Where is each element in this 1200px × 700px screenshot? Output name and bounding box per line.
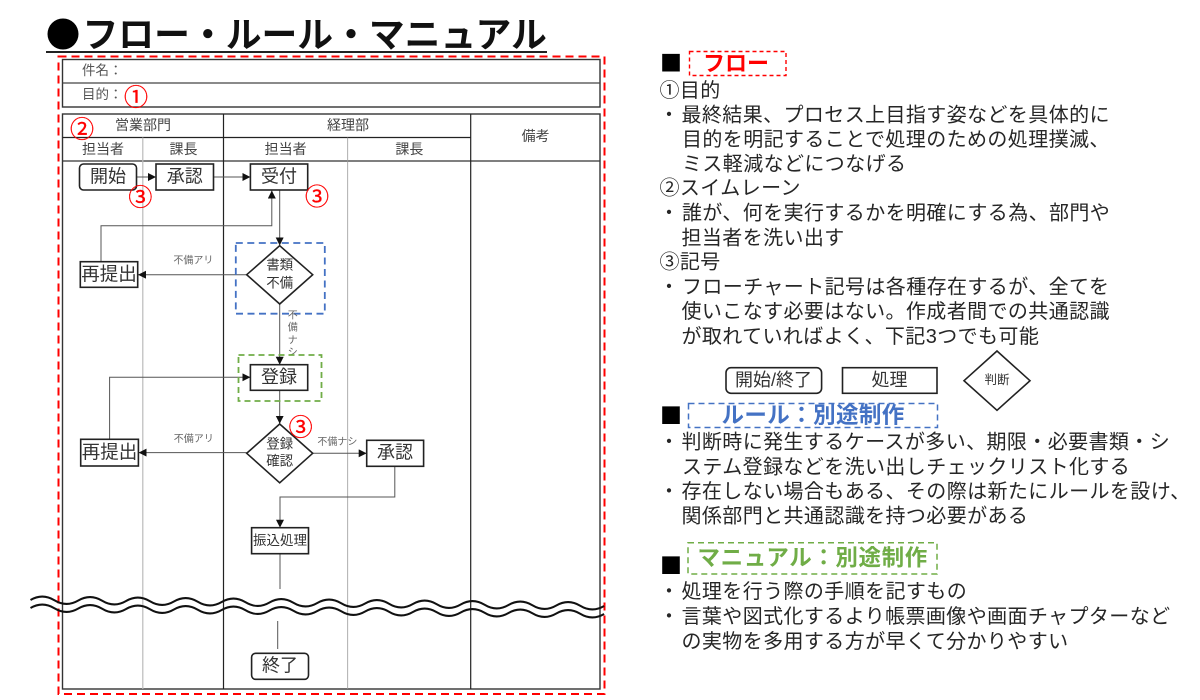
decision: registration check: 登録	[266, 436, 294, 452]
green dashed manual highlight	[238, 355, 322, 401]
text block: manual: 言葉や図式化するより帳票画像や画面チャプターなど	[682, 605, 1170, 628]
text block: rule: ステム登録などを洗い出しチェックリスト化する	[682, 456, 1130, 479]
swimlane table: 経理部	[327, 117, 369, 133]
heading: manual: マニュアル：別途制作	[698, 546, 928, 570]
label: defect yes 2: 不備アリ	[174, 433, 214, 445]
text block: rule	[659, 431, 1190, 528]
text block: manual: ・	[659, 606, 679, 628]
step: start	[80, 164, 136, 190]
step: start: 開始	[90, 166, 126, 186]
decision: document check: 不備	[266, 276, 293, 290]
decision: registration check: 確認	[266, 454, 294, 468]
swimlane table: 担当者	[82, 141, 124, 157]
text block: symbols: ・	[659, 277, 679, 299]
text block: purpose: ①目的	[660, 74, 721, 103]
step: receipt	[250, 164, 308, 190]
text block: rule: 存在しない場合もある、その際は新たにルールを設け、	[682, 480, 1190, 503]
text block: purpose	[659, 74, 1110, 175]
text block: rule: ・	[659, 432, 679, 454]
heading: manual: ■	[660, 548, 682, 580]
text block: purpose: 目的を明記することで処理のための処理撲滅、	[682, 128, 1110, 151]
text block: manual: 処理を行う際の手順を記すもの	[682, 580, 967, 603]
symbol: process	[842, 368, 937, 393]
red dashed frame	[58, 56, 604, 694]
symbol: start/end: 開始/終了	[735, 370, 812, 390]
heading: flow: ■	[660, 46, 682, 78]
subject and purpose table: 目的：	[82, 87, 122, 102]
heading: manual	[660, 543, 937, 580]
step: receipt: 受付	[261, 166, 297, 186]
heading: rule: ルール：別途制作	[722, 403, 905, 428]
text block: manual	[659, 580, 1170, 653]
text block: manual: ・	[659, 581, 679, 603]
symbol: start/end	[726, 368, 822, 393]
step: approval	[156, 164, 214, 190]
blue dashed rule highlight	[236, 243, 325, 314]
step: end	[252, 653, 308, 679]
swimlane table: 課長	[170, 141, 198, 157]
step: resubmit 1: 再提出	[81, 264, 137, 284]
label: defect yes 1: 不備アリ	[173, 254, 213, 266]
step: approval 2: 承認	[377, 442, 413, 462]
step: registration: 登録	[261, 367, 297, 387]
label: defect none vertical: 不	[288, 310, 298, 322]
callout number 3 start: ③	[128, 178, 152, 212]
heading: rule	[660, 398, 938, 430]
step: approval: 承認	[167, 166, 203, 186]
decision: registration check	[247, 424, 313, 483]
subject and purpose table: 件名：	[82, 63, 122, 78]
text block: symbols: フローチャート記号は各種存在するが、全てを	[682, 276, 1109, 299]
callout number 3 receipt: ③	[305, 177, 329, 212]
step: resubmit 2: 再提出	[82, 442, 137, 462]
callout number 2: ②	[70, 110, 94, 144]
symbol: process: 処理	[872, 370, 908, 390]
text block: rule: ・	[659, 481, 679, 503]
decision: document check: 書類	[266, 258, 294, 272]
heading: flow	[660, 46, 786, 78]
heading: rule: ■	[660, 398, 682, 430]
title: フロー・ルール・マニュアル	[82, 15, 547, 55]
callout number 1: ①	[124, 78, 148, 112]
text block: purpose: ・	[659, 104, 679, 126]
panel: flow explanation	[659, 46, 1190, 653]
step: approval 2	[367, 440, 424, 466]
break wave lines	[30, 597, 604, 617]
text block: rule: 関係部門と共通認識を持つ必要がある	[682, 505, 1028, 528]
swimlane table: 備考	[522, 128, 550, 144]
panel: flowchart form	[30, 56, 604, 694]
swimlane table: 担当者	[265, 141, 307, 157]
text block: swimlane: 誰が、何を実行するかを明確にする為、部門や	[682, 202, 1110, 225]
text block: swimlane: 担当者を洗い出す	[682, 226, 845, 249]
step: transfer processing	[252, 528, 308, 554]
swimlane table: 営業部門	[115, 117, 171, 133]
legend symbols	[726, 351, 1030, 410]
step: transfer processing: 振込処理	[253, 533, 307, 548]
text block: purpose: 最終結果、プロセス上目指す姿などを具体的に	[682, 103, 1110, 126]
label: defect none vertical: シ	[288, 348, 298, 358]
callout number 3 check: ③	[289, 408, 313, 442]
text block: swimlane: ・	[659, 203, 679, 225]
step: registration	[250, 365, 308, 390]
text block: rule: 判断時に発生するケースが多い、期限・必要書類・シ	[682, 431, 1170, 454]
text block: swimlane: ②スイムレーン	[660, 172, 801, 201]
symbol: decision	[964, 351, 1030, 410]
text block: symbols	[659, 246, 1110, 348]
step: end: 終了	[262, 656, 298, 676]
label: defect none: 不備ナシ	[317, 436, 357, 448]
text block: manual: の実物を多用する方が早くて分かりやすい	[682, 630, 1068, 653]
heading: flow: フロー	[703, 51, 769, 76]
text block: symbols: 使いこなす必要はない。作成者間での共通認識	[682, 300, 1110, 323]
text block: symbols: が取れていればよく、下記3つでも可能	[682, 325, 1039, 348]
text block: purpose: ミス軽減などにつなげる	[682, 152, 906, 175]
text block: swimlane	[659, 172, 1110, 249]
symbol: decision: 判断	[984, 373, 1010, 387]
label: defect none vertical: 備	[288, 322, 298, 334]
swimlane table	[62, 114, 600, 689]
text block: symbols: ③記号	[660, 246, 721, 275]
label: defect none vertical: ナ	[288, 334, 298, 346]
label: defect none vertical	[288, 310, 298, 358]
subject and purpose table	[62, 60, 600, 107]
decision: document check	[247, 246, 313, 304]
connectors	[101, 177, 395, 649]
swimlane table: 課長	[395, 141, 423, 157]
